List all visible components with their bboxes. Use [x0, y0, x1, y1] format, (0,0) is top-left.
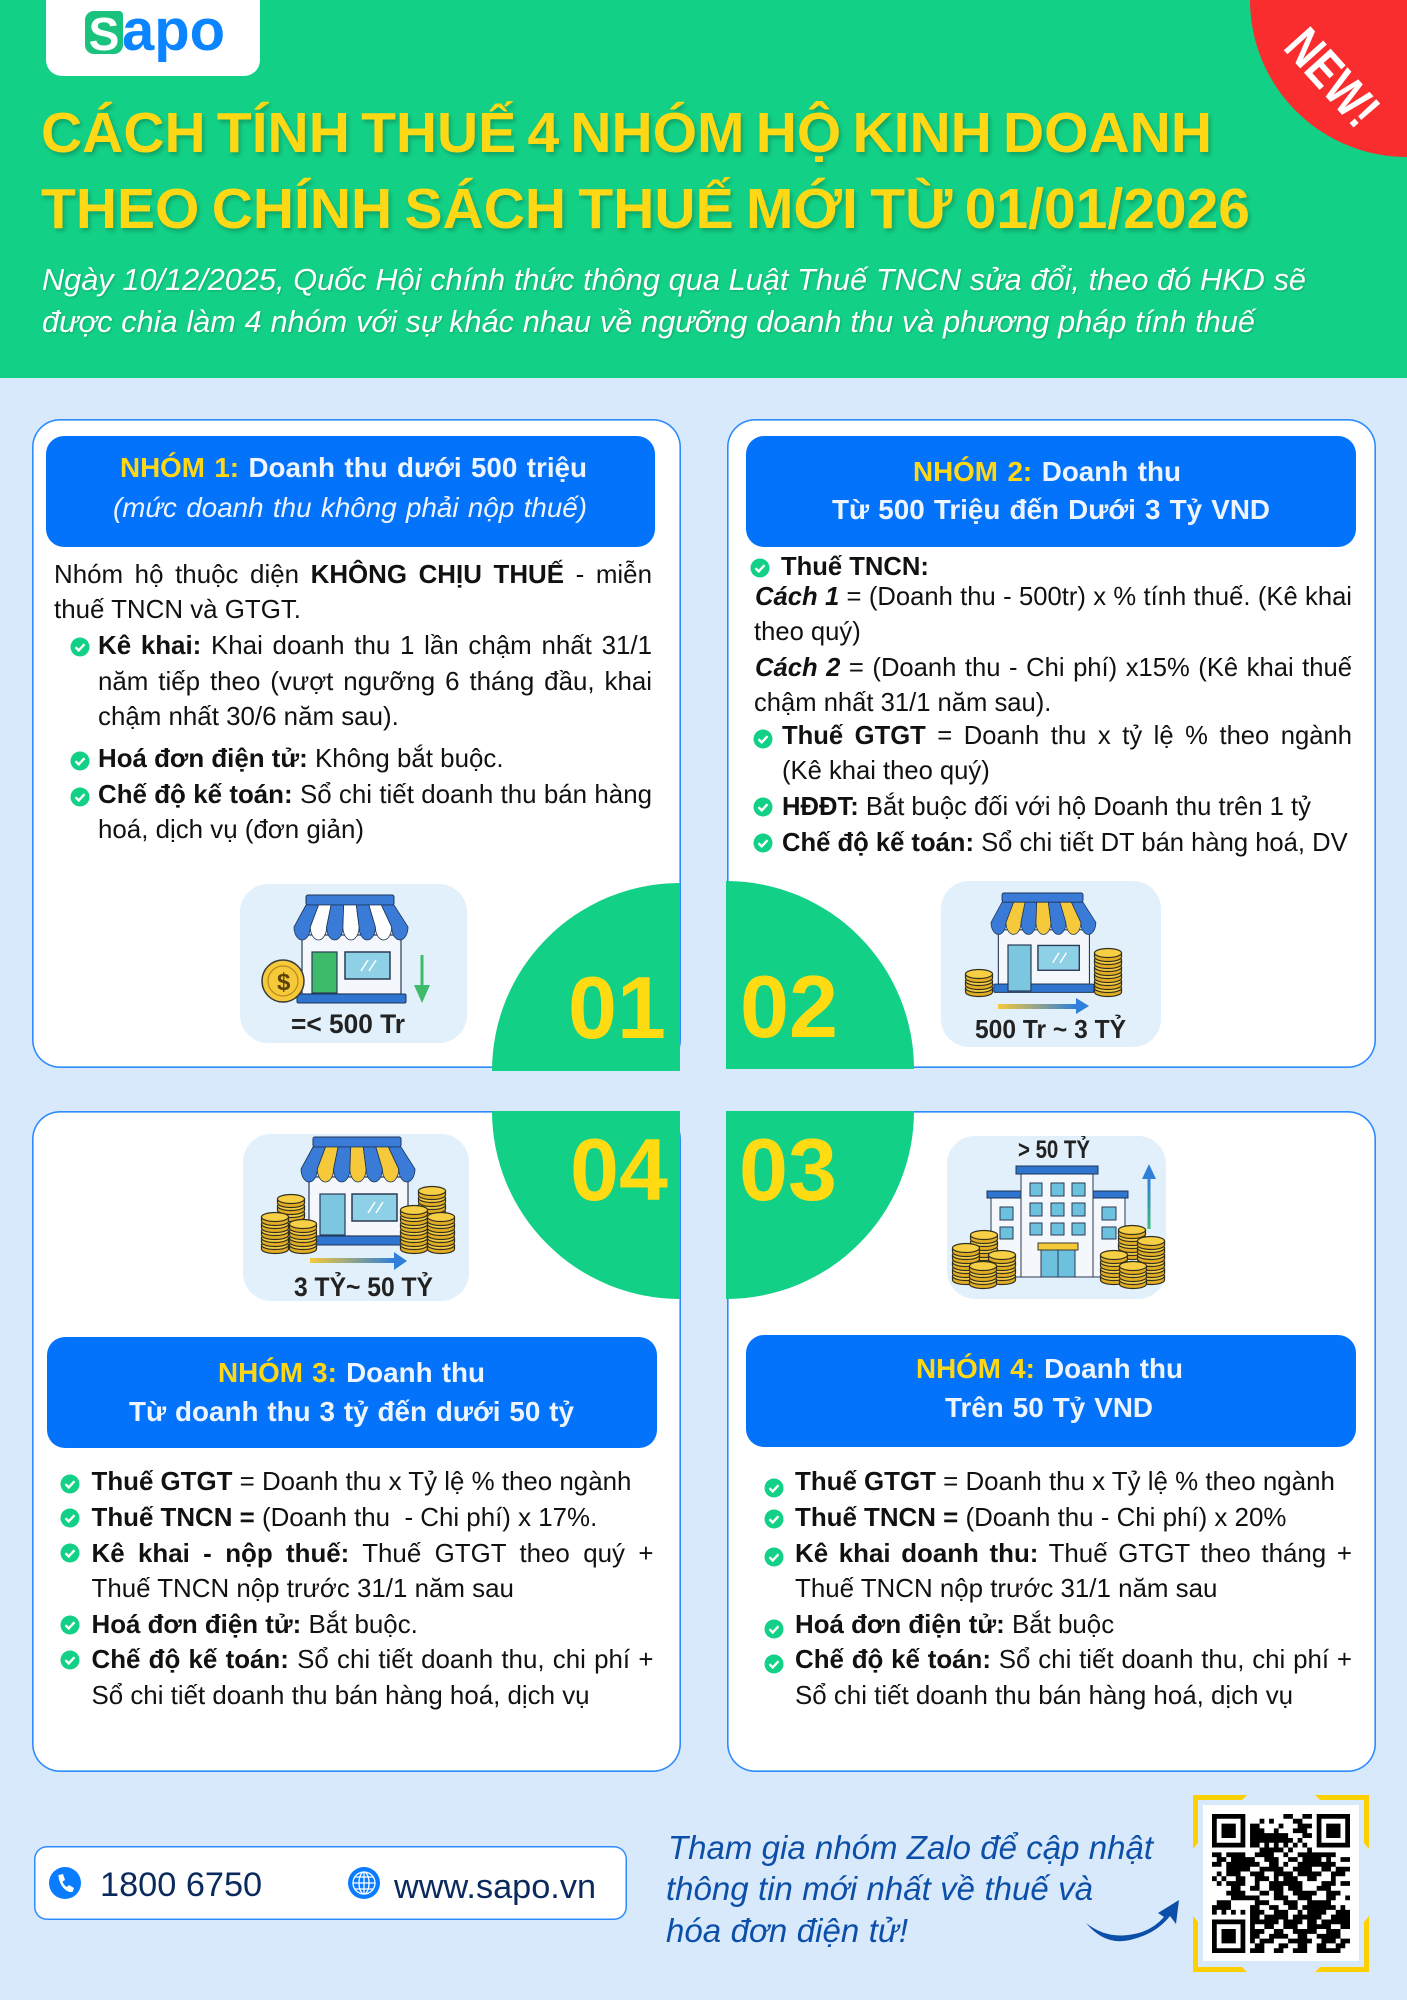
icon: check	[60, 1474, 80, 1494]
text: declaration: Kê khai: Khai doanh thu 1 lần chậm nhất 31/1	[98, 632, 652, 660]
logo S tile	[85, 11, 123, 54]
panel: group 2: (Kê khai theo quý)	[782, 757, 990, 785]
panel: group 3: Sổ chi tiết doanh thu bán hàng hoá, dịch vụ	[92, 1682, 590, 1710]
icon: phone	[49, 1867, 81, 1899]
title line 1: CÁCH TÍNH THUẾ 4 NHÓM HỘ KINH DOANH	[41, 101, 1212, 165]
icon: shop 500 Tr to 3 Ty	[941, 881, 1161, 1047]
panel: group 2: theo quý)	[754, 618, 861, 646]
subtitle line 2: được chia làm 4 nhóm với sự khác nhau về ngưỡng doanh thu và phương pháp tính thuế	[42, 304, 1255, 339]
header band	[0, 0, 1407, 378]
title line 2: THEO CHÍNH SÁCH THUẾ MỚI TỪ 01/01/2026	[41, 177, 1250, 241]
panel: group 4	[727, 1111, 1376, 1772]
text: accounting: Chế độ kế toán: Sổ chi tiết doanh thu bán hàng	[98, 781, 652, 809]
icon: check	[60, 1650, 80, 1670]
icon: check	[750, 558, 770, 578]
heading: group 1	[46, 436, 655, 547]
heading: group 3	[47, 1337, 657, 1448]
icon: check	[764, 1510, 784, 1528]
panel: group 1	[32, 419, 681, 1068]
icon: check	[764, 1548, 784, 1566]
text: personal income tax: Thuế TNCN:	[781, 553, 929, 581]
subtitle line 1: Ngày 10/12/2025, Quốc Hội chính thức thông qua Luật Thuế TNCN sửa đổi, theo đó HKD sẽ	[42, 262, 1306, 297]
quarter circle: number 01: 01	[568, 958, 666, 1057]
icon: check	[764, 1654, 784, 1674]
heading: group 3: NHÓM 3: Doanh thu	[218, 1357, 485, 1388]
icon: check	[70, 788, 90, 806]
callout: join Zalo group: hóa đơn điện tử!	[666, 1912, 908, 1949]
icon: check	[754, 798, 772, 816]
heading: group 2: NHÓM 2: Doanh thu	[913, 456, 1181, 487]
icon: check	[754, 730, 772, 748]
icon: office building over 50 Ty: > 50 TỶ	[1018, 1136, 1090, 1164]
callout: join Zalo group: Tham gia nhóm Zalo để cập nhật	[668, 1829, 1153, 1866]
badge: NEW!	[1250, 0, 1407, 157]
callout: join Zalo group	[666, 1826, 1156, 1956]
text: personal income tax: Thuế TNCN = (Doanh thu - Chi phí) x 17%.	[92, 1504, 597, 1532]
panel: group 4: Thuế TNCN nộp trước 31/1 năm sau	[795, 1575, 1217, 1603]
quarter circle: number 02	[726, 881, 914, 1069]
text: personal income tax: Thuế TNCN = (Doanh thu - Chi phí) x 20%	[795, 1504, 1286, 1532]
icon: check	[754, 834, 772, 852]
icon: check	[70, 752, 90, 770]
badge text: NEW!	[1273, 17, 1390, 139]
heading: group 4: Trên 50 Tỷ VND	[945, 1392, 1153, 1423]
text: filing: Kê khai doanh thu: Thuế GTGT theo tháng +	[795, 1540, 1352, 1568]
quarter circle: number 04: 04	[570, 1120, 668, 1219]
text: accounting: Chế độ kế toán: Sổ chi tiết DT bán hàng hoá, DV	[782, 829, 1348, 857]
arrow to QR code	[1080, 1895, 1185, 1947]
text: method 2: Cách 2 = (Doanh thu - Chi phí) x15% (Kê khai thuế	[755, 654, 1352, 682]
phone number: 1800 6750	[100, 1866, 262, 1904]
text: group 1 intro: Nhóm hộ thuộc diện KHÔNG CHỊU THUẾ - miễn	[54, 561, 652, 589]
panel: group 2: chậm nhất 31/1 năm sau).	[754, 689, 1051, 717]
heading: group 3: Từ doanh thu 3 tỷ đến dưới 50 tỷ	[129, 1396, 574, 1427]
text: e-invoice: Hoá đơn điện tử: Bắt buộc.	[92, 1611, 418, 1639]
panel: group 1: năm tiếp theo (vượt ngưỡng 6 tháng đầu, khai	[98, 668, 652, 696]
panel: group 4: Sổ chi tiết doanh thu bán hàng hoá, dịch vụ	[795, 1682, 1293, 1710]
text: e-invoice: Hoá đơn điện tử: Bắt buộc	[795, 1611, 1114, 1639]
text: e-invoice: HĐĐT: Bắt buộc đối với hộ Doanh thu trên 1 tỷ	[782, 793, 1311, 821]
icon: globe	[348, 1867, 380, 1899]
contact box	[34, 1846, 627, 1920]
text: e-invoice: Hoá đơn điện tử: Không bắt buộc.	[98, 745, 504, 773]
icon: shop 500 Tr to 3 Ty: 500 Tr ~ 3 TỶ	[975, 1014, 1126, 1044]
quarter circle: number 04	[492, 1111, 680, 1299]
logo S tile: S	[89, 8, 119, 60]
panel: group 1: thuế TNCN và GTGT.	[54, 596, 301, 624]
panel: group 1: hoá, dịch vụ (đơn giản)	[98, 816, 364, 844]
icon: check	[764, 1478, 784, 1498]
text: VAT: Thuế GTGT = Doanh thu x tỷ lệ % theo ngành	[782, 722, 1352, 750]
heading: group 2	[746, 436, 1356, 547]
text: VAT: Thuế GTGT = Doanh thu x Tỷ lệ % theo ngành	[795, 1468, 1335, 1496]
panel: group 1: chậm nhất 30/6 năm sau).	[98, 703, 399, 731]
quarter circle: number 01	[492, 883, 680, 1071]
heading: group 1: (mức doanh thu không phải nộp thuế)	[113, 492, 587, 523]
icon: small shop under 500 Tr: $	[277, 969, 291, 996]
panel: group 3	[32, 1111, 681, 1772]
text: method 1: Cách 1 = (Doanh thu - 500tr) x % tính thuế. (Kê khai	[755, 583, 1352, 611]
text: accounting: Chế độ kế toán: Sổ chi tiết doanh thu, chi phí +	[795, 1646, 1352, 1674]
callout: join Zalo group: thông tin mới nhất về thuế và	[666, 1870, 1093, 1907]
quarter circle: number 03: 03	[739, 1120, 837, 1219]
icon: office building over 50 Ty	[947, 1136, 1166, 1299]
text: VAT: Thuế GTGT = Doanh thu x Tỷ lệ % theo ngành	[92, 1468, 631, 1496]
icon: check	[70, 638, 90, 656]
heading: group 4	[746, 1335, 1356, 1447]
icon: shop 3 Ty to 50 Ty	[243, 1134, 469, 1301]
heading: group 2: Từ 500 Triệu đến Dưới 3 Tỷ VND	[832, 494, 1270, 525]
icon: check	[60, 1544, 80, 1562]
panel: group 3: Thuế TNCN nộp trước 31/1 năm sau	[92, 1575, 514, 1603]
text: filing: Kê khai - nộp thuế: Thuế GTGT theo quý +	[92, 1540, 653, 1568]
logo: Sapo	[46, 0, 260, 76]
text: accounting: Chế độ kế toán: Sổ chi tiết doanh thu, chi phí +	[92, 1646, 653, 1674]
heading: group 4: NHÓM 4: Doanh thu	[916, 1353, 1183, 1384]
heading: group 1: NHÓM 1: Doanh thu dưới 500 triệu	[120, 452, 587, 483]
icon: small shop under 500 Tr: =< 500 Tr	[291, 1009, 405, 1039]
icon: check	[60, 1508, 80, 1528]
panel: group 2	[727, 419, 1376, 1068]
quarter circle: number 03	[726, 1111, 914, 1299]
quarter circle: number 02: 02	[740, 957, 838, 1056]
icon: check	[764, 1620, 784, 1638]
website: www.sapo.vn	[394, 1868, 596, 1906]
QR code with yellow frame	[1193, 1795, 1369, 1972]
icon: small shop under 500 Tr	[240, 884, 467, 1043]
icon: check	[60, 1616, 80, 1634]
